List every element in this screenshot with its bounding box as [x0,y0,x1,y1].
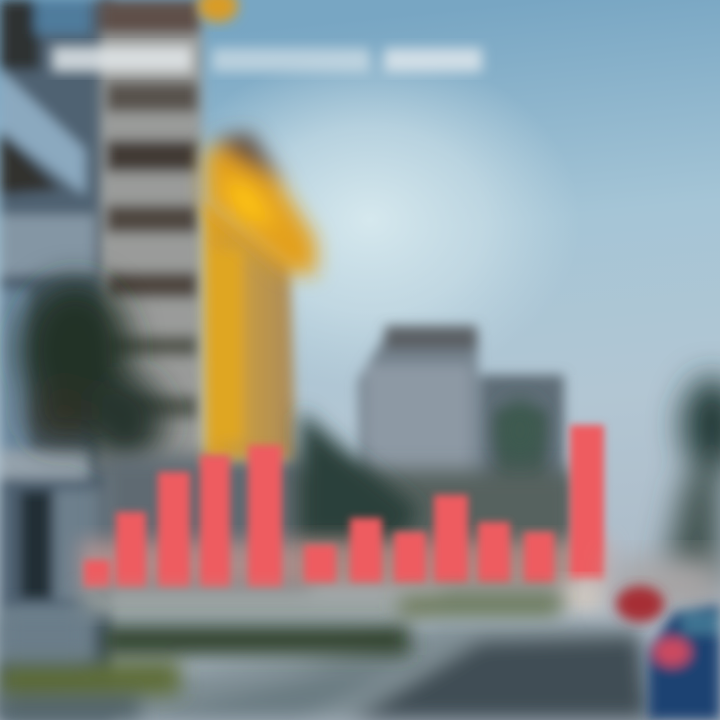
yellow tower [203,200,296,460]
trees in front of building [20,280,165,465]
red car [616,586,664,622]
dark backdrop behind red bars, left [100,455,576,595]
bar base plinth [80,582,605,616]
top yellow corner [198,0,238,22]
right buildings at horizon [615,560,720,610]
red bar chart [84,425,604,588]
striped tower [100,0,202,470]
bushes along street [0,598,560,720]
yellow tower roof [205,132,316,275]
right palm tree [665,377,720,590]
blue car [648,605,720,720]
soft pale halo around bars [80,540,610,590]
mid trees [300,400,542,540]
distant grey buildings [358,326,564,535]
road [0,625,650,720]
left building facade [0,0,112,720]
blurred title text band [52,46,482,72]
